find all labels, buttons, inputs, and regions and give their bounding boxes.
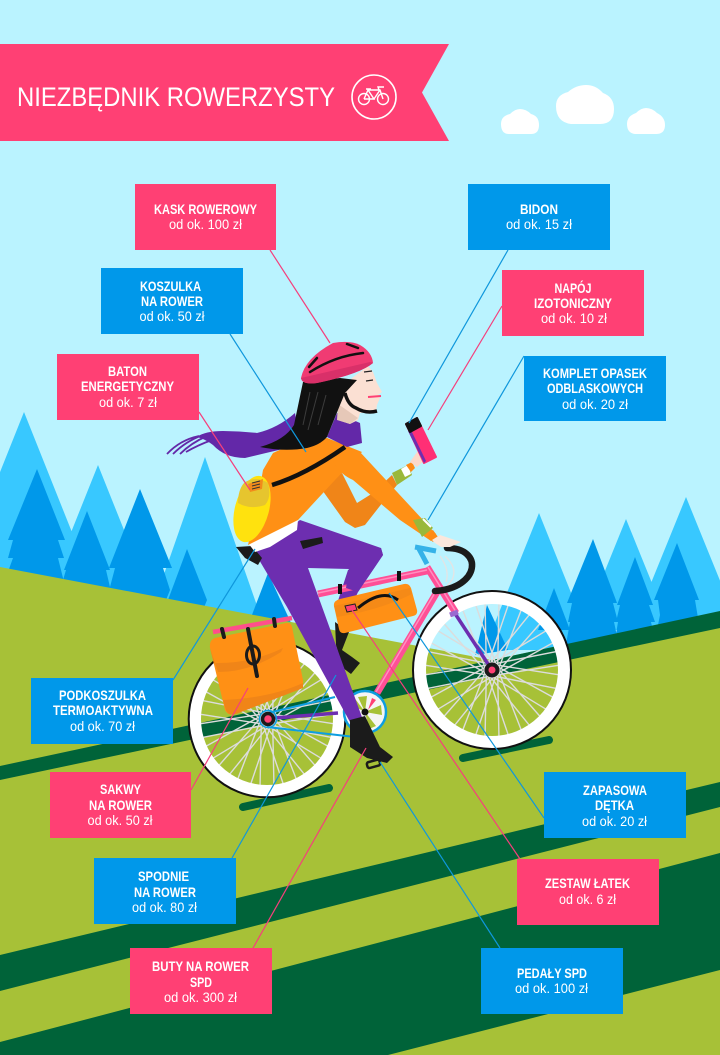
label: SPODNIE NA ROWER: SPODNIE <box>138 868 189 884</box>
label: KOMPLET OPASEK ODBLASKOWYCH: ODBLASKOWYCH <box>547 380 643 396</box>
waist bag <box>227 472 277 546</box>
label: PODKOSZULKA TERMOAKTYWNA: od ok. 70 zł <box>70 718 136 734</box>
scarf tail <box>197 413 300 458</box>
label: KASK ROWEROWY: KASK ROWEROWY <box>154 201 258 217</box>
front hub <box>486 664 498 676</box>
saddle <box>236 546 262 565</box>
label: BIDON <box>468 184 610 250</box>
scarf <box>167 413 362 458</box>
label: ZAPASOWA DĘTKA <box>544 772 686 838</box>
label: SAKWY NA ROWER: SAKWY <box>100 781 142 797</box>
far leg <box>335 548 383 674</box>
label: BATON ENERGETYCZNY <box>57 354 199 420</box>
title: NIEZBĘDNIK ROWERZYSTY <box>17 82 335 112</box>
label: ZESTAW ŁATEK: ZESTAW ŁATEK <box>545 875 630 891</box>
pink tubes <box>318 567 456 693</box>
label: PODKOSZULKA TERMOAKTYWNA: TERMOAKTYWNA <box>53 702 153 718</box>
raised hand with cuff <box>392 452 428 485</box>
hubs and chainring <box>260 664 498 733</box>
near hand with cuff <box>413 518 461 547</box>
label: BATON ENERGETYCZNY: BATON <box>108 363 147 379</box>
rear pannier <box>210 618 303 714</box>
far shoe and calf <box>335 622 360 674</box>
icon: bicycle in circle <box>352 75 396 119</box>
label: PODKOSZULKA TERMOAKTYWNA <box>31 678 173 744</box>
front shoe and pedal <box>350 716 393 768</box>
clouds <box>501 85 665 134</box>
label: ZAPASOWA DĘTKA: od ok. 20 zł <box>582 813 648 829</box>
fork <box>454 612 490 667</box>
dark green stripe 2 <box>0 782 720 991</box>
label: PEDAŁY SPD: PEDAŁY SPD <box>517 965 587 981</box>
label: BUTY NA ROWER SPD <box>130 948 272 1014</box>
hillside ground <box>0 567 720 1055</box>
wheel shadows <box>243 740 549 807</box>
label: KOMPLET OPASEK ODBLASKOWYCH <box>524 356 666 421</box>
label: KASK ROWEROWY <box>135 184 276 250</box>
torso <box>248 438 362 545</box>
rear hub <box>260 710 276 728</box>
far arm <box>320 473 397 528</box>
leader lines <box>173 250 544 948</box>
label: KOSZULKA NA ROWER: KOSZULKA <box>140 278 201 294</box>
label: NAPÓJ IZOTONICZNY: od ok. 10 zł <box>541 310 608 326</box>
label: BIDON: BIDON <box>520 201 558 217</box>
bicycle frame <box>267 547 490 737</box>
chainring <box>344 691 386 733</box>
label: PODKOSZULKA TERMOAKTYWNA: PODKOSZULKA <box>59 687 146 703</box>
label: SAKWY NA ROWER: NA ROWER <box>89 797 152 813</box>
near arm <box>327 438 436 541</box>
label: PEDAŁY SPD: od ok. 100 zł <box>515 980 589 996</box>
label: NAPÓJ IZOTONICZNY: IZOTONICZNY <box>534 295 613 311</box>
forest: left <box>0 412 292 625</box>
pannier straps and buckle <box>222 619 275 676</box>
label: KOSZULKA NA ROWER: od ok. 50 zł <box>140 308 205 324</box>
handlebar <box>435 548 472 591</box>
bag tag <box>345 604 357 612</box>
label: SAKWY NA ROWER <box>50 772 191 838</box>
scarf fringe <box>167 435 212 454</box>
label: KASK ROWEROWY: od ok. 100 zł <box>169 216 243 232</box>
label: KOMPLET OPASEK ODBLASKOWYCH: KOMPLET OPASEK <box>543 365 647 381</box>
dark green stripe 3 <box>0 853 720 1055</box>
label: NAPÓJ IZOTONICZNY <box>502 270 644 336</box>
bottle <box>406 418 436 463</box>
label: SAKWY NA ROWER: od ok. 50 zł <box>88 812 153 828</box>
label: KOSZULKA NA ROWER <box>101 268 243 334</box>
label: BUTY NA ROWER SPD: SPD <box>190 974 212 990</box>
label: ZESTAW ŁATEK <box>517 859 659 925</box>
banner with title <box>0 44 449 141</box>
label: KOMPLET OPASEK ODBLASKOWYCH: od ok. 20 zł <box>562 396 629 412</box>
frame bag <box>334 584 417 633</box>
chain stays <box>267 697 355 737</box>
label: PEDAŁY SPD <box>481 948 623 1014</box>
label: SPODNIE NA ROWER: od ok. 80 zł <box>132 899 198 915</box>
hair <box>260 378 357 450</box>
neck shadow <box>337 404 358 424</box>
label: KOSZULKA NA ROWER: NA ROWER <box>141 293 203 309</box>
dark green stripe 1 <box>0 611 720 780</box>
label: SPODNIE NA ROWER: NA ROWER <box>134 884 196 900</box>
label: BUTY NA ROWER SPD: BUTY NA ROWER <box>152 958 249 974</box>
label: SPODNIE NA ROWER <box>94 858 236 924</box>
brake cables <box>440 556 454 593</box>
scarf collar <box>327 413 362 447</box>
label: ZAPASOWA DĘTKA: ZAPASOWA <box>583 782 647 798</box>
main leg <box>255 520 383 722</box>
front wheel <box>413 591 571 749</box>
bag handle <box>358 596 398 608</box>
label: ZESTAW ŁATEK: od ok. 6 zł <box>559 891 617 907</box>
face <box>338 366 382 424</box>
label: BATON ENERGETYCZNY: ENERGETYCZNY <box>81 378 175 394</box>
rider <box>167 342 461 768</box>
label: BATON ENERGETYCZNY: od ok. 7 zł <box>99 394 158 410</box>
label: ZAPASOWA DĘTKA: DĘTKA <box>595 797 634 813</box>
chin strap <box>345 393 377 412</box>
top tube straps <box>340 571 399 594</box>
rear wheel <box>189 641 345 797</box>
helmet <box>301 342 373 383</box>
eye, brow and lips <box>364 371 381 397</box>
shoulder strap <box>272 447 345 485</box>
head stem <box>415 547 436 564</box>
white belt <box>248 520 298 552</box>
label: BUTY NA ROWER SPD: od ok. 300 zł <box>164 989 238 1005</box>
pocket on trousers <box>300 537 323 549</box>
forest: right <box>475 497 720 655</box>
label: BIDON: od ok. 15 zł <box>506 216 573 232</box>
pannier rack <box>213 618 292 632</box>
label: NAPÓJ IZOTONICZNY: NAPÓJ <box>554 279 592 296</box>
